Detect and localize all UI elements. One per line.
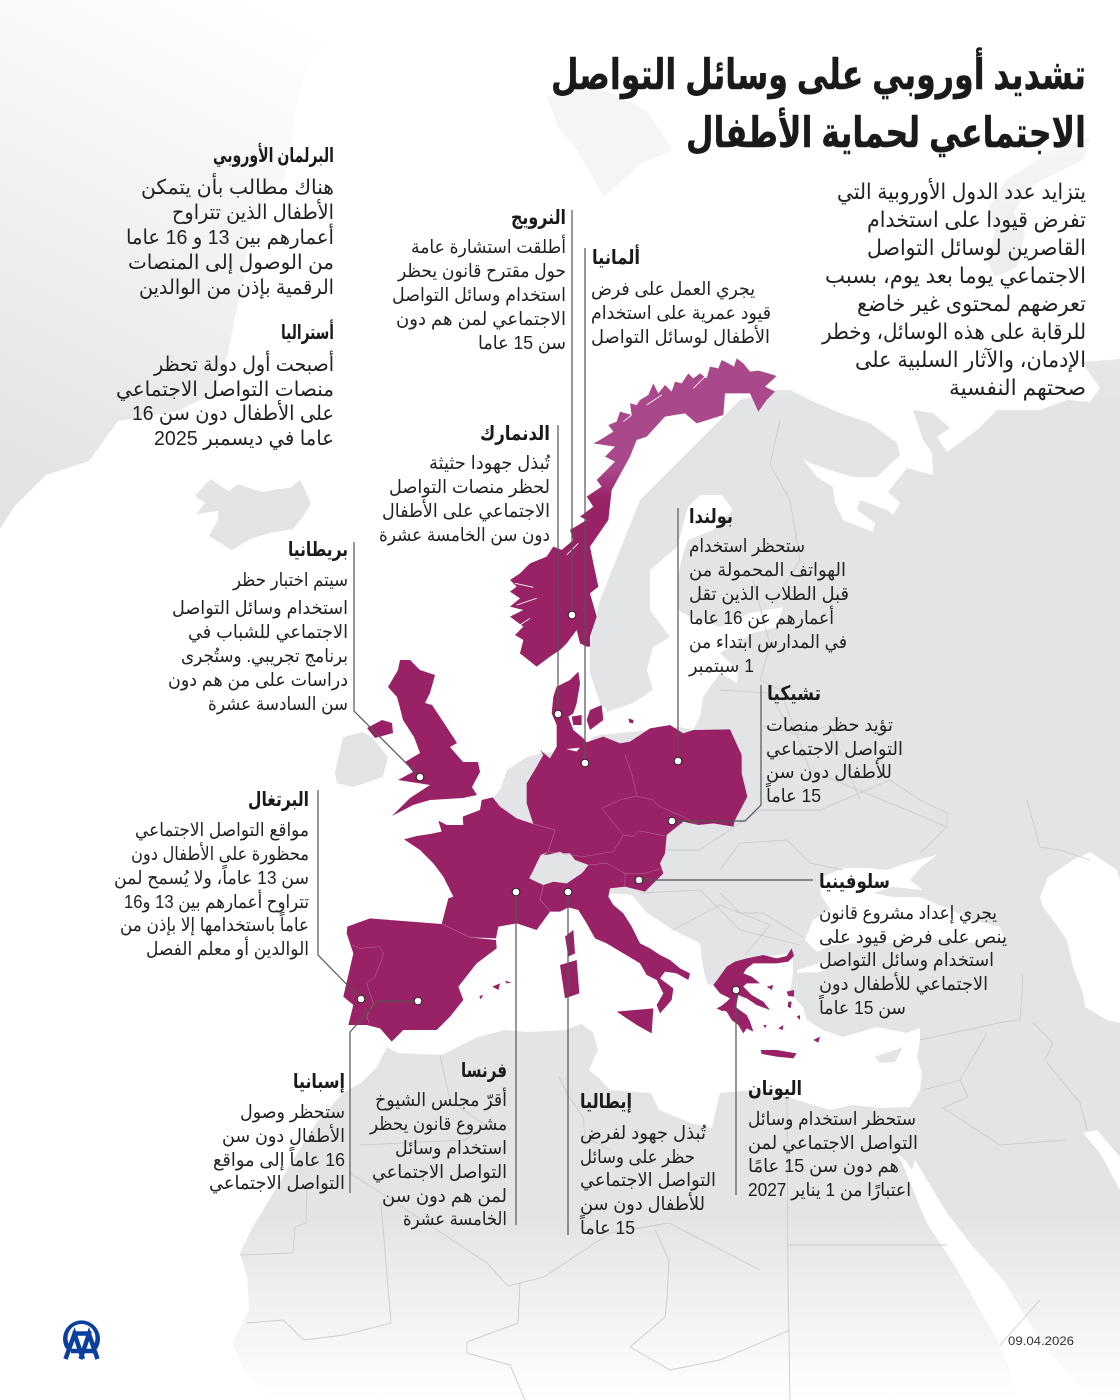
- land: Eurasia and Africa: [232, 359, 1120, 1400]
- callout: Denmark: تُبذل جهودا حثيثة: [429, 452, 551, 474]
- land: Greenland: [0, 0, 362, 529]
- callout: Australia: أصبحت أول دولة تحظر: [153, 351, 334, 376]
- intro text: القاصرين لوسائل التواصل: [867, 235, 1086, 260]
- country: Corsica: [565, 930, 575, 957]
- callout: Poland: الهواتف المحمولة من: [689, 559, 846, 581]
- callout: European Parliament: هناك مطالب بأن يتمكن: [141, 173, 334, 199]
- country: Greece: [713, 948, 820, 1058]
- callout: Britain: [168, 539, 424, 781]
- callout: Australia: عاما في ديسمبر 2025: [154, 427, 334, 450]
- callout: Greece: اليونان: [748, 1078, 802, 1100]
- callout: Britain: بريطانيا: [288, 539, 348, 561]
- sea: Persian Gulf: [1083, 1130, 1120, 1190]
- callout: Poland: أعمارهم عن 16 عاما: [689, 605, 834, 629]
- callout: Denmark: [379, 423, 562, 718]
- callout: Italy: التواصل الاجتماعي: [580, 1169, 716, 1191]
- date: 09.04.2026: [1008, 1334, 1074, 1348]
- callout: Norway: أطلقت استشارة عامة: [411, 234, 566, 258]
- callout: Germany: الأطفال لوسائل التواصل: [591, 325, 770, 348]
- callout: Norway: [392, 207, 576, 619]
- land: Svalbard: [547, 83, 673, 197]
- callout: Slovenia: ينص على فرض قيود على: [819, 926, 1007, 948]
- callout: Slovenia: استخدام وسائل التواصل: [819, 949, 994, 971]
- callout: Britain: استخدام وسائل التواصل: [172, 597, 348, 619]
- intro text: تفرض قيودا على استخدام: [867, 207, 1086, 233]
- callout: Slovenia: الاجتماعي للأطفال دون: [819, 972, 988, 995]
- callout: France: مشروع قانون يحظر: [369, 1113, 507, 1135]
- callout: Czechia: للأطفال دون سن: [766, 760, 892, 783]
- sea: Marmara: [797, 963, 837, 973]
- map: restricting countries: [343, 358, 820, 1058]
- callout: European Parliament: الأطفال الذين تتراوح: [172, 199, 334, 224]
- country: Denmark: [552, 672, 633, 750]
- title: [551, 47, 1086, 158]
- callout: Italy: تُبذل جهود لفرض: [580, 1122, 707, 1144]
- country: Switzerland (not restricted): [529, 852, 588, 885]
- land: Ireland: [335, 732, 388, 787]
- callout: Poland: ستحظر استخدام: [689, 535, 805, 557]
- callout: Norway: استخدام وسائل التواصل: [392, 284, 566, 306]
- callout: Czechia: التواصل الاجتماعي: [766, 738, 903, 760]
- callout: Slovenia: يجري إعداد مشروع قانون: [819, 902, 997, 924]
- callout: Czechia: تشيكيا: [767, 683, 821, 705]
- callout: Portugal: مواقع التواصل الاجتماعي: [135, 819, 309, 841]
- callout: Greece: ستحظر استخدام وسائل: [748, 1108, 916, 1130]
- intro text: [821, 178, 1086, 401]
- callout: Germany: قيود عمرية على استخدام: [591, 302, 771, 324]
- callout: Denmark: الدنمارك: [480, 423, 550, 445]
- intro text: الإدمان، والآثار السلبية على: [855, 347, 1086, 372]
- callout: Britain: الاجتماعي للشباب في: [188, 621, 348, 643]
- country: Spain and Portugal: [343, 918, 497, 1042]
- islands: Balearic: [479, 981, 512, 999]
- intro text: يتزايد عدد الدول الأوروبية التي: [837, 178, 1086, 205]
- callout: Italy: إيطاليا: [580, 1091, 632, 1113]
- callout: Poland: [674, 506, 849, 765]
- sea: Baltic: [578, 495, 783, 740]
- callout: Australia: منصات التواصل الاجتماعي: [116, 378, 334, 401]
- callout: Slovenia: سلوفينيا: [819, 871, 890, 893]
- callout: France: فرنسا: [461, 1060, 507, 1082]
- callout: Spain: [209, 997, 422, 1194]
- callout: Denmark: الاجتماعي على الأطفال: [382, 499, 550, 522]
- callout: Slovenia: سن 15 عاماً: [818, 994, 906, 1019]
- callout: Spain: التواصل الاجتماعي: [209, 1172, 345, 1194]
- icon: AA logo: [63, 1320, 100, 1359]
- callout: Germany: يجري العمل على فرض: [591, 278, 755, 300]
- callout: Denmark: دون سن الخامسة عشرة: [379, 524, 550, 546]
- callout: Greece: [732, 986, 918, 1201]
- callout: Spain: ستحظر وصول: [240, 1101, 345, 1123]
- country borders: [240, 420, 1090, 1400]
- callout: Germany: ألمانيا: [592, 243, 640, 269]
- callout: Portugal: عاماً باستخدامها إلا بإذن من: [120, 911, 309, 936]
- callout: France: أقرّ مجلس الشيوخ: [375, 1087, 507, 1111]
- callout: Norway: حول مقترح قانون يحظر: [397, 260, 566, 282]
- callout: Australia: أستراليا: [281, 318, 334, 344]
- callout: Italy: 15 عاماً: [579, 1214, 635, 1238]
- callout: Czechia: 15 عاماً: [765, 782, 821, 806]
- callout: Italy: [564, 888, 716, 1238]
- callout: France: الخامسة عشرة: [403, 1208, 507, 1230]
- callout: Portugal: الوالدين أو معلم الفصل: [146, 936, 309, 960]
- internal borders: [352, 755, 698, 1023]
- callout: Norway: النرويج: [511, 207, 566, 229]
- callout: Britain: دراسات على من هم دون: [168, 669, 348, 691]
- land: Iceland: [195, 479, 311, 550]
- callout: Czechia: [668, 683, 903, 825]
- callout: Norway: سن 15 عاما: [478, 332, 566, 354]
- country: Sardinia: [560, 960, 579, 998]
- callout: Germany: [581, 243, 771, 767]
- callout: Australia: [116, 318, 334, 450]
- countries: Germany, Poland, Czechia, Austria, Slovenia and Italy: [527, 725, 747, 1013]
- callout: European Parliament: [126, 142, 334, 300]
- country: Norway: [510, 358, 777, 667]
- callout: France: استخدام وسائل: [395, 1137, 507, 1159]
- callout: Britain: برنامج تجريبي. وستُجرى: [181, 645, 348, 667]
- callout: Portugal: البرتغال: [248, 789, 309, 811]
- callout: Portugal: محظورة على الأطفال دون: [131, 842, 309, 865]
- callout: Poland: بولندا: [689, 506, 733, 528]
- callout: European Parliament: البرلمان الأوروبي: [213, 142, 334, 168]
- callout: Greece: هم دون سن 15 عامًا: [748, 1155, 899, 1177]
- callout: Italy: حظر على وسائل: [580, 1146, 695, 1168]
- callout: European Parliament: من الوصول إلى المنصات: [128, 251, 334, 275]
- callout: Portugal: تتراوح أعمارهم بين 13 و16: [124, 889, 309, 913]
- sea: Black Sea: [805, 855, 1005, 952]
- callout: Italy: للأطفال دون سن: [580, 1192, 705, 1215]
- country: France: [404, 797, 555, 938]
- callout: Denmark: لحظر منصات التواصل: [389, 476, 550, 498]
- callout: Poland: قبل الطلاب الذين تقل: [689, 583, 849, 605]
- callout: Australia: على الأطفال دون سن 16: [132, 400, 334, 425]
- callout: Spain: 16 عاماً إلى مواقع: [213, 1146, 345, 1171]
- callout: Spain: الأطفال دون سن: [222, 1124, 345, 1147]
- callout: Czechia: تؤيد حظر منصات: [766, 714, 893, 736]
- country: Northern Ireland: [367, 720, 393, 738]
- callout: Greece: اعتبارًا من 1 يناير 2027: [748, 1179, 911, 1201]
- country: Sicily: [617, 1008, 653, 1033]
- callout: France: التواصل الاجتماعي: [372, 1161, 507, 1183]
- callout: Britain: سن السادسة عشرة: [208, 693, 348, 715]
- callout: European Parliament: الرقمية بإذن من الوالدين: [139, 276, 334, 300]
- callout: France: [369, 888, 520, 1230]
- land: Cyprus: [875, 1047, 903, 1063]
- sea: Caspian: [1040, 852, 1120, 1023]
- country: United Kingdom: [388, 660, 480, 816]
- callout: European Parliament: أعمارهم بين 13 و 16 عاما: [126, 224, 334, 249]
- callout: Norway: الاجتماعي لمن هم دون: [396, 308, 566, 330]
- intro text: صحتهم النفسية: [949, 375, 1086, 401]
- callout: Slovenia: [635, 871, 1007, 1019]
- callout: France: لمن هم دون سن: [382, 1185, 507, 1207]
- land: Novaya Zemlya: [987, 137, 1090, 277]
- callout: Spain: إسبانيا: [293, 1071, 345, 1093]
- callout: Poland: 1 سبتمبر: [688, 655, 754, 677]
- sea: Red Sea: [893, 1150, 1090, 1400]
- intro text: للرقابة على هذه الوسائل، وخطر: [821, 319, 1086, 344]
- callout: Britain: سيتم اختبار حظر: [232, 569, 348, 591]
- intro text: تعرضهم لمحتوى غير خاضع: [857, 291, 1086, 317]
- callout: Portugal: [114, 789, 365, 1003]
- callout: Poland: في المدارس ابتداء من: [689, 631, 847, 653]
- callout: Portugal: سن 13 عاماً، ولا يُسمح لمن: [114, 864, 309, 889]
- intro text: الاجتماعي يوما بعد يوم، بسبب: [825, 263, 1086, 289]
- callout: Greece: التواصل الاجتماعي لمن: [748, 1132, 918, 1154]
